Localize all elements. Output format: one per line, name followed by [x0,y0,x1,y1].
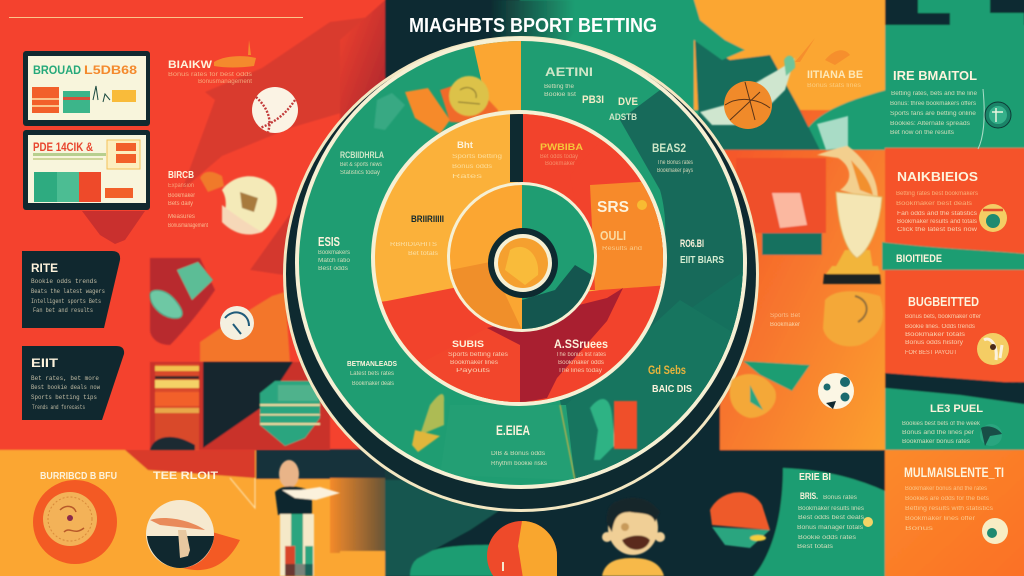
text block: mid left [168,170,208,229]
illustration: stacked books and shield [150,362,330,450]
panel text: green bottom [797,472,873,550]
panel text: orange bottom right: Bookmaker bonus and the rates [905,486,987,492]
middle ring labels: Payouts [456,368,490,374]
middle ring labels: PWBIBA [540,142,584,152]
text block: small label: Sports Bet [770,313,800,319]
icon: basketball [724,81,772,129]
outer ring labels: RO6.BI [680,238,704,250]
middle ring labels: BRIIRIIIII [411,214,444,224]
outer ring labels: PB3I [582,94,604,106]
panel text: orange bottom right: Bookies are odds for the bets [905,496,989,502]
panel text: green bottom: Bookmaker results lines [798,506,864,512]
panel text: green top right: Sports fans are betting online [890,111,977,117]
middle ring labels: The lines today [558,368,602,374]
panel text: orange bottom right: Betting results with statistics [905,506,993,512]
outer ring labels: BAIC DIS [652,384,692,395]
outer ring labels: Rhythm bookie risks [491,461,547,467]
dark panel: EIIT: Sports betting tips [31,394,97,401]
text block: mid left: Expansion [168,183,194,189]
illustration: cartoon man [602,498,665,576]
outer ring labels: ADSTB [609,112,637,122]
panel text: red lower right [905,294,981,356]
illustration: orange cap [710,492,770,548]
icon: orange emblem [979,204,1007,232]
outer ring labels: AETINI [545,65,593,79]
panel text: red lower right: BUGBEITTED [908,294,979,309]
panel label: green strip: BIOITIEDE [896,253,942,265]
middle ring labels: The bonus list rates [556,352,606,358]
panel text: green lower right [902,403,983,445]
outer ring labels: BETMANLEADS [347,361,397,368]
panel text: green lower right: Bookmaker bonus rates [902,439,970,445]
illustration: standing figure [230,460,340,576]
dark panel: EIIT [22,346,124,420]
outer ring labels: Betting the [544,84,575,90]
wheel chart [283,30,760,512]
middle ring labels: OULI [600,228,626,243]
outer ring labels: Gd Sebs [648,363,686,377]
icon: baseball [252,87,298,133]
outer ring labels: Best odds [318,266,348,272]
panel text: green bottom: Bonus rates [823,495,857,501]
panel text: green lower right: Bookies best bets of the week [902,421,981,427]
text block: top orange: IITIANA BE [807,69,863,81]
dark panel: RITE [22,251,120,328]
middle ring labels: RBRIDIAHITS [390,242,437,248]
panel text: green bottom: ERIE BI [799,472,831,483]
text block: top left: Bonusmanagement [198,79,252,85]
outer ring labels: Statistics today [340,170,380,176]
icon: soccer ball [818,373,854,409]
icon: cream badge [982,518,1008,544]
dark panel: EIIT: Bet rates, bet more [31,375,99,382]
outer ring labels: The Bonus rates [657,160,693,166]
middle ring labels: Bookmaker [545,161,575,167]
text block: mid left: BIRCB [168,170,194,181]
outer ring labels: BEAS2 [652,141,686,155]
illustration: trophy [817,116,882,284]
outer ring labels: Latest bets rates [350,371,394,377]
inner ring [447,182,600,335]
bottom heading second: TEE RLOIT [153,470,218,482]
middle ring labels: Bookmaker lines [450,360,498,366]
wedge decoration bottom [412,394,637,480]
icon: green badge [978,89,1011,149]
dark panel: RITE: Beats the latest wagers [31,288,105,295]
panel text: red lower right: FOR BEST PAYOUT [905,350,957,356]
icon: golden glove [730,374,776,418]
middle ring labels: Bet odds today [540,154,578,160]
icon: green leaf badge [980,424,1002,446]
panel text: red right: Click the latest bets now [897,227,978,233]
chart card 2 [23,130,150,210]
outer ring labels: Bookmakers [318,250,350,256]
middle ring labels: Sports betting [452,154,502,160]
panel text: green top right: Bonus: three bookmakers offers [890,101,976,107]
text block: mid left: Bets daily [168,201,193,207]
middle ring [370,110,670,410]
outer ring labels: RCBIIDHRLA [340,150,384,160]
text block: top left: Bonus rates for best odds [168,72,252,78]
bottom heading left: BURRIBCD B BFU [40,471,117,482]
panel text: red lower right: Bookmaker totals [905,332,965,338]
middle ring labels: SUBIS [452,339,484,349]
card 2 heading: PDE 14CIK & [33,140,93,154]
dark panel: EIIT: EIIT [31,356,59,370]
wedge decoration top [374,76,498,134]
outer ring labels: Bookmaker pays [657,168,693,174]
chart card 1 [23,51,150,126]
panel text: orange bottom right: Bonus [905,526,933,532]
panel text: green bottom: Bonus manager totals [797,525,863,531]
middle ring labels: Rates [452,174,482,180]
panel text: green bottom: Best odds best deals [798,515,864,521]
panel text: green lower right: Bonus and the lines per [902,430,974,436]
panel text: red right: Fan odds and the statistics [897,211,977,217]
panel text: green top right: IRE BMAITOL [893,68,977,83]
middle ring labels: SRS [597,199,629,216]
panel text: green top right: Bet now on the results [890,130,954,136]
title: MIAGHBTS BPORT BETTING [409,15,657,37]
illustration: leather helmet [823,291,883,346]
decorative header line [9,17,303,18]
text block: small label [770,313,800,328]
outer ring labels: Bet & sports news [340,162,382,168]
outer ring labels: E.EIEA [496,422,530,438]
outer ring labels: ESIS [318,234,340,249]
panel text: green lower right: LE3 PUEL [930,403,983,415]
centre hub [488,228,558,298]
panel text: red lower right: Bookie lines. Odds trends [905,324,975,330]
panel text: green bottom: Best totals [797,544,833,550]
outer ring labels: DIB & Bonus odds [491,451,545,457]
text block: top left [168,40,256,85]
dark panel: RITE: Fan bet and results [33,307,93,314]
text block: top left: BIAIKW [168,59,213,71]
outer ring labels: EIIT BIARS [680,255,724,266]
middle ring labels [390,140,647,374]
panel text: orange bottom right [904,464,1004,532]
icon: basketball bottom [487,521,557,576]
panel text: red right [896,169,978,233]
dark red shadow behind cards [82,211,145,244]
outer ring labels: DVE [618,96,638,108]
panel text: red right: NAIKBIEIOS [897,169,978,184]
middle ring labels: Results and [602,246,642,252]
panel text: green top right: Bookies: Alternate spreads [890,121,970,127]
panel text: red right: Bookmaker best deals [896,201,972,207]
dark panel: EIIT: Trends and forecasts [32,404,85,411]
illustration: basketball player arm [700,56,795,125]
icon: small ball [200,292,290,362]
panel text: red right: Betting rates best bookmakers [896,191,978,197]
dark panel: RITE: Intelligent sports Bets [31,298,101,305]
outer ring segments [299,41,743,485]
wheel outer rim [283,36,759,512]
panel text: green top right [890,68,978,136]
text block: mid left: Bookmaker [168,193,195,199]
illustration: sneaker panel [150,258,215,345]
card 1 heading: L5DB68 [84,63,137,77]
card 1 heading: BROUAD [33,63,81,77]
outer ring labels: Bookie list [544,92,576,98]
panel text: red lower right: Bonus odds history [905,340,963,346]
icon: coin [33,480,117,564]
icon: player head [200,172,277,234]
text block: small label: Bookmaker [770,322,800,328]
card 1 bars [32,86,136,113]
text block: top orange [795,38,863,89]
dark panel: RITE: Bookie odds trends [31,278,97,285]
text block: top orange: Bonus stats lines [807,83,861,89]
panel text: green bottom: BRIS. [800,491,818,501]
middle ring labels: Bonus odds [452,164,492,170]
panel text: red lower right: Bonus bets, bookmaker offer [905,314,981,320]
text block: mid left: Measures [168,214,195,220]
dark panel: EIIT: Best bookie deals now [31,384,100,391]
middle ring labels: Bet totals [408,251,438,257]
panel text: green bottom: Bookie odds rates [798,535,856,541]
panel text: orange bottom right: Bookmaker lines offer [905,516,975,522]
middle ring labels: Sports betting rates [448,352,508,358]
dark panel: RITE: RITE [31,261,58,275]
middle ring labels: A.SSruees [554,337,608,351]
icon: athlete circle [146,500,240,570]
middle ring labels: Bht [457,140,473,150]
card 1 heading [33,63,137,77]
card 2 yellow table [33,140,140,169]
outer ring labels [318,65,724,467]
outer ring labels: Match ratio [318,258,351,264]
icon: striped ball [977,333,1009,365]
panel text: green top right: Betting rates, bets and the line [891,91,978,97]
card 2 bars [34,172,133,202]
middle ring labels: Bookmaker odds [558,360,604,366]
panel text: red right: Bookmaker results and totals [897,219,977,225]
text block: mid left: Bonusmanagement [168,223,208,229]
outer ring labels: Bookmaker deals [352,381,394,387]
